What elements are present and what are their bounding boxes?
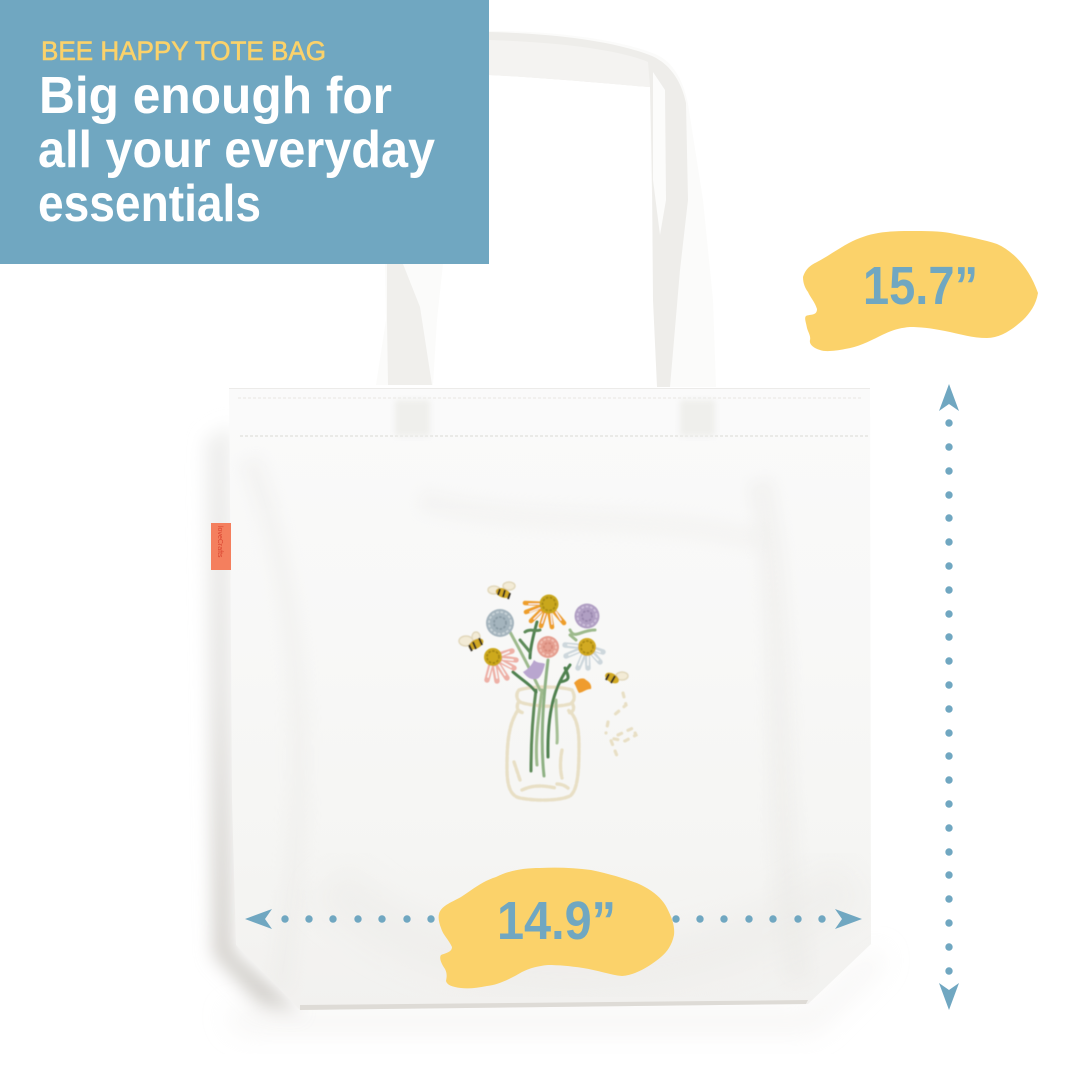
heading: all your everyday bbox=[38, 121, 435, 179]
width callout: 14.9 inches bbox=[439, 868, 674, 988]
stems bbox=[510, 622, 595, 776]
flower: orange daisy bbox=[525, 594, 564, 627]
title panel bbox=[0, 0, 489, 264]
bag drop shadow bbox=[206, 425, 885, 1030]
height dimension arrow bbox=[939, 384, 959, 1010]
side tag: loveCrafts bbox=[216, 526, 223, 558]
heading: Big enough for bbox=[39, 67, 392, 125]
bee: left bbox=[459, 632, 485, 652]
tote bag photo bbox=[206, 31, 885, 1030]
width callout: 14.9 inches: 14.9” bbox=[497, 891, 616, 951]
flower: pink clover bbox=[537, 636, 559, 658]
heading bbox=[38, 67, 435, 233]
bee flight trail bbox=[606, 693, 636, 761]
height callout: 15.7 inches bbox=[803, 231, 1038, 351]
flower: white daisy bbox=[565, 638, 603, 668]
bag body bbox=[229, 388, 871, 1012]
flower: blue clover bbox=[486, 609, 514, 637]
embroidery: flowers in mason jar with bees bbox=[459, 582, 636, 800]
flower: pink daisy bbox=[484, 648, 516, 681]
bee: right bbox=[603, 670, 628, 686]
height callout: 15.7 inches: 15.7” bbox=[863, 256, 978, 316]
handle: left strap bbox=[376, 264, 443, 385]
width dimension arrow bbox=[245, 909, 862, 929]
jar outline bbox=[507, 687, 579, 800]
side tag bbox=[211, 523, 231, 570]
eyebrow label: BEE HAPPY TOTE BAG bbox=[41, 36, 326, 66]
flower: purple clover bbox=[574, 604, 600, 628]
heading: essentials bbox=[38, 175, 261, 233]
bee: top bbox=[488, 582, 515, 600]
handle: rear strap bbox=[489, 31, 716, 387]
flower: small orange bud bbox=[574, 678, 591, 693]
flower: lilac bud bbox=[523, 660, 545, 679]
